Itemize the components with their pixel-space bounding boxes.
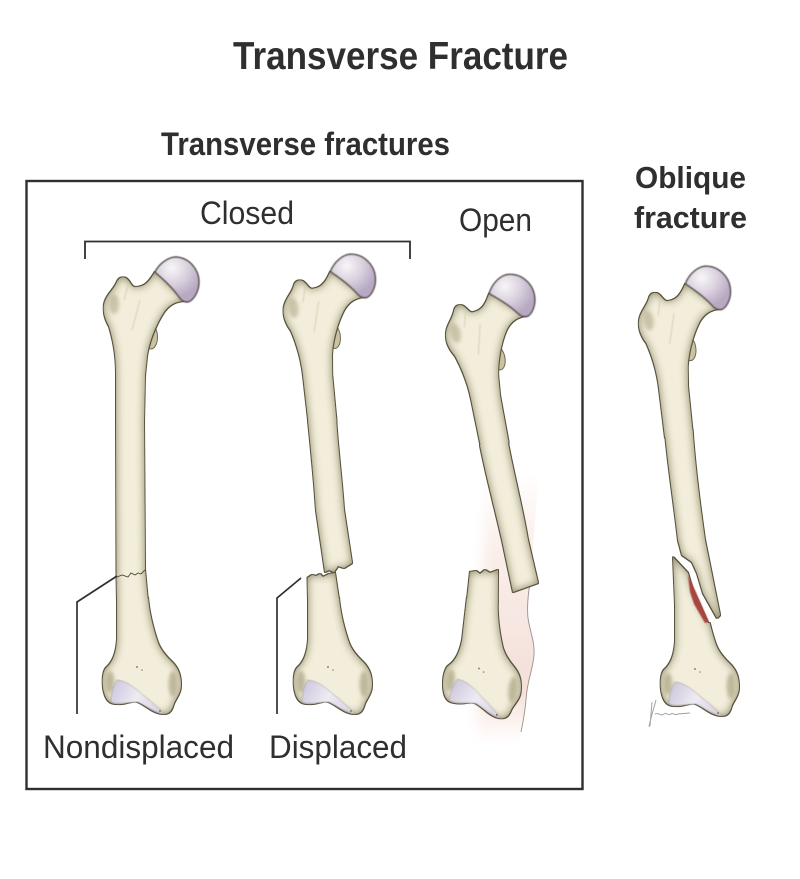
label: nondisplaced: Nondisplaced	[43, 729, 234, 765]
fracture blood	[688, 575, 709, 623]
bone: open fracture femur	[439, 270, 550, 720]
soft tissue: open wound skin	[474, 500, 536, 732]
leader line: nondisplaced	[77, 576, 117, 714]
heading: transverse fractures: Transverse fractures	[161, 126, 450, 162]
bone: nondisplaced femur	[103, 257, 199, 714]
upper fragment	[439, 287, 550, 592]
bone: oblique fracture femur	[635, 263, 739, 716]
heading: oblique fracture	[634, 160, 747, 235]
leader line: displaced	[277, 578, 301, 714]
heading: oblique fracture: Oblique	[635, 160, 746, 195]
signature	[649, 700, 690, 727]
lower fragment	[661, 557, 739, 716]
label: closed: Closed	[200, 195, 294, 231]
bone: displaced femur	[280, 252, 381, 714]
crack	[117, 570, 145, 577]
lower fragment	[294, 573, 372, 714]
bracket: closed group	[85, 242, 410, 259]
upper fragment	[635, 280, 734, 618]
panel: transverse fractures box	[26, 181, 582, 789]
lower fragment	[440, 570, 531, 720]
upper fragment	[280, 268, 378, 572]
title: Transverse Fracture	[233, 35, 568, 78]
heading: oblique fracture: fracture	[634, 200, 747, 235]
label: displaced: Displaced	[269, 729, 407, 765]
label: open: Open	[459, 202, 532, 238]
